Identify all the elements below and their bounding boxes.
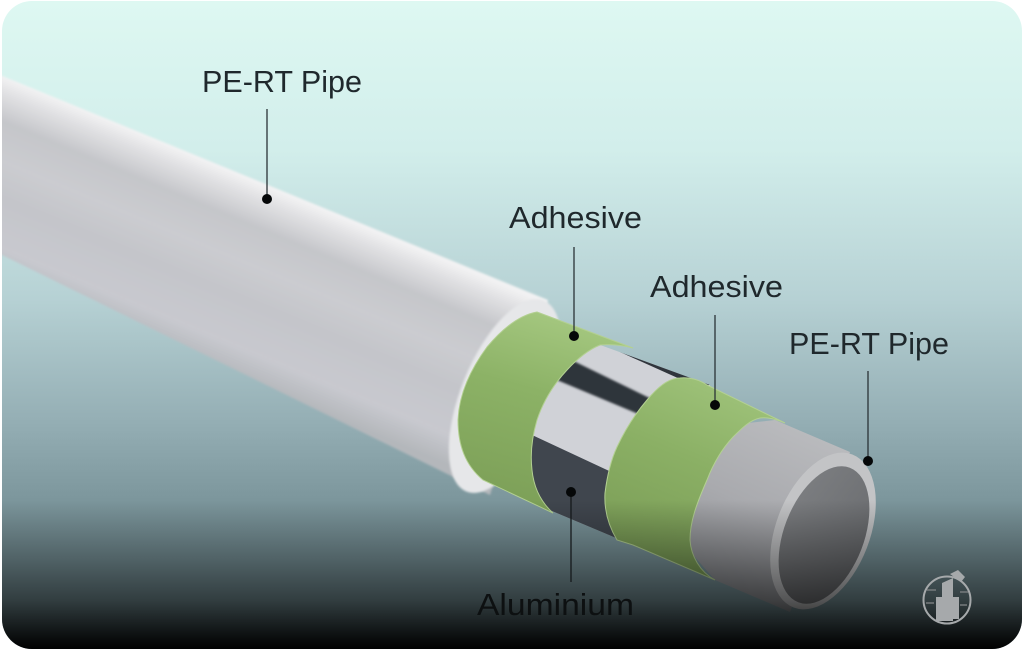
label: Aluminium: Aluminium bbox=[477, 587, 634, 622]
label: Adhesive (second): Adhesive bbox=[650, 269, 783, 304]
label: Adhesive (first): Adhesive bbox=[509, 200, 642, 235]
pipe opening interior bbox=[778, 466, 870, 604]
label: PE-RT Pipe (outer): PE-RT Pipe bbox=[202, 64, 362, 99]
bottom darkening bbox=[0, 500, 1024, 650]
label: PE-RT Pipe (inner) bbox=[789, 326, 949, 466]
label: Adhesive (first) bbox=[509, 200, 642, 341]
pipe opening rim bbox=[770, 452, 876, 610]
label: Adhesive (second) bbox=[650, 269, 783, 410]
first adhesive layer bbox=[458, 312, 633, 513]
pipe cut end ring bbox=[448, 300, 560, 494]
second adhesive layer bbox=[605, 378, 785, 580]
watermark logo bbox=[924, 570, 970, 624]
inner PE-RT pipe bbox=[690, 420, 876, 612]
label: PE-RT Pipe (outer) bbox=[202, 64, 362, 204]
aluminium layer bbox=[532, 346, 710, 538]
label: PE-RT Pipe (inner): PE-RT Pipe bbox=[789, 326, 949, 361]
main pipe body bbox=[0, 75, 548, 495]
label: Aluminium bbox=[477, 487, 634, 622]
